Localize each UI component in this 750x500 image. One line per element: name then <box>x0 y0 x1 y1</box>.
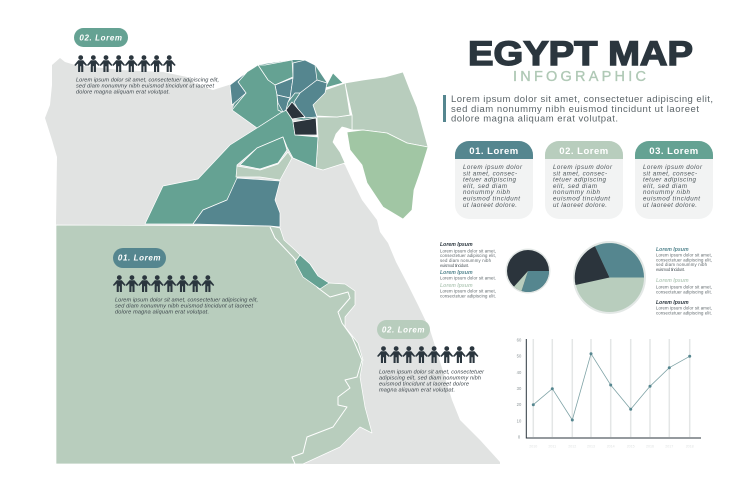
card 02 <box>545 141 623 219</box>
callout text: dolore magna aliquam erat volutpat. <box>76 90 170 96</box>
card 01 <box>455 141 533 219</box>
region: Dakahlia <box>288 60 317 102</box>
x axis labels: 2010 <box>529 444 537 448</box>
region: grey desert land <box>45 58 500 464</box>
left pie legend: Lorem Ipsum <box>440 283 473 289</box>
left pie legend: sed diam nonummy nibh <box>440 258 492 263</box>
people icons <box>74 55 176 72</box>
pill label <box>113 248 166 268</box>
card 01: Lorem ipsum dolor <box>463 164 523 171</box>
region: Beni Suef <box>236 152 292 180</box>
card 02: nonummy nibh <box>553 189 601 196</box>
card 01: tetuer adipiscing <box>463 177 517 184</box>
left pie legend: Lorem Ipsum <box>440 270 473 276</box>
y axis labels: 40 <box>517 370 522 375</box>
callout text: Lorem ipsum dolor sit amet, consectetuer <box>379 370 485 376</box>
intro paragraph: Lorem ipsum dolor sit amet, consectetuer adipiscing elit, <box>451 94 713 105</box>
x axis labels: 2016 <box>646 444 654 448</box>
intro paragraph <box>443 94 713 124</box>
region: Matruh and Giza <box>145 110 318 224</box>
pill label: 02. Lorem <box>382 326 425 334</box>
right pie legend: Lorem Ipsum <box>656 300 689 306</box>
right pie legend: Lorem Ipsum <box>656 247 689 253</box>
y axis labels: 50 <box>517 354 522 359</box>
region: north Sinai <box>345 72 428 147</box>
callout 02 upper <box>74 28 219 96</box>
callout text: magna aliquam erat volutpat. <box>379 388 455 394</box>
card 03: nonummy nibh <box>643 189 691 196</box>
left pie legend: consectetuer adipiscing elit, <box>440 253 496 258</box>
region: Beheira <box>232 65 282 128</box>
card 03: 03. Lorem <box>649 146 699 157</box>
region: Minya <box>193 178 280 227</box>
left pie legend <box>440 242 496 298</box>
y axis labels: 30 <box>517 386 522 391</box>
right pie legend: consectetuer adipiscing elit. <box>656 310 712 316</box>
people icons <box>113 275 214 292</box>
region: Sharqia <box>294 80 327 118</box>
subtitle: INFOGRAPHIC <box>513 69 646 85</box>
left pie legend: euismod tincidunt. <box>440 263 469 268</box>
callout 01 <box>113 248 258 316</box>
card 02: ut laoreet dolore. <box>553 202 607 209</box>
card 02: elit, sed diam <box>553 183 597 190</box>
y axis labels <box>517 338 522 440</box>
pill label: 01. Lorem <box>118 254 161 262</box>
right pie legend: Lorem Ipsum <box>656 278 689 284</box>
left pie legend: consectetuer adipiscing elit. <box>440 294 496 298</box>
map of Egypt <box>45 58 500 464</box>
region: Kafr el-Sheikh <box>258 60 293 85</box>
card 01: nonummy nibh <box>463 189 511 196</box>
intro paragraph: dolore magna aliquam erat volutpat. <box>451 114 618 124</box>
card 03: tetuer adipiscing <box>643 177 697 184</box>
right pie legend: consectetuer adipiscing elit. <box>656 290 712 294</box>
region: Ismailia <box>313 83 350 117</box>
callout text: sed diam nonummy nibh euismod tincidunt ut laoreet <box>76 84 214 90</box>
card 03: elit, sed diam <box>643 183 687 190</box>
callout text: sed diam nonummy nibh euismod tincidunt ut laoreet <box>115 304 253 310</box>
line chart <box>517 338 701 448</box>
large pie chart <box>573 241 646 314</box>
left pie legend: Lorem ipsum dolor sit amet, <box>440 248 496 254</box>
intro paragraph: sed diam nonummy nibh euismod tincidunt ut laoreet <box>451 104 699 115</box>
region: dark lower district <box>293 118 317 135</box>
card 03: euismod tincidunt <box>643 196 700 202</box>
right pie legend: Lorem ipsum dolor sit amet, <box>656 284 712 290</box>
right pie legend: consectetuer adipiscing elit, <box>656 258 712 262</box>
left pie legend: Lorem Ipsum <box>440 242 473 248</box>
x axis labels: 2014 <box>607 444 615 448</box>
card 03: ut laoreet dolore. <box>643 202 697 209</box>
x axis labels: 2013 <box>587 444 595 448</box>
y axis labels: 20 <box>517 402 522 407</box>
callout text: Lorem ipsum dolor sit amet, consectetuer adipiscing elit, <box>76 78 219 84</box>
card 01: sit amet, consec- <box>463 170 517 177</box>
river Nile line <box>270 227 362 464</box>
card 01: 01. Lorem <box>469 146 519 157</box>
right pie legend: sed diam nonummy nibh <box>656 262 708 267</box>
data line <box>533 354 690 420</box>
small pie chart <box>506 248 550 294</box>
left pie legend: Lorem ipsum dolor sit amet. <box>440 276 496 280</box>
card 03 <box>635 141 713 219</box>
x axis labels <box>529 444 694 448</box>
people icons <box>377 346 478 363</box>
left pie legend: Lorem ipsum dolor sit amet, <box>440 288 496 294</box>
region: southern western desert <box>56 225 372 464</box>
data points <box>532 352 691 422</box>
title: EGYPT MAP <box>468 35 693 73</box>
region: south Sinai <box>347 130 428 219</box>
region: Gharbia <box>275 78 293 98</box>
x axis labels: 2011 <box>548 444 556 448</box>
pill label: 02. Lorem <box>79 34 123 42</box>
card 02: Lorem ipsum dolor <box>553 164 613 171</box>
region: Monufia <box>277 95 290 112</box>
x axis labels: 2015 <box>627 444 635 448</box>
card 01: elit, sed diam <box>463 183 507 190</box>
card 02: tetuer adipiscing <box>553 177 607 184</box>
region: Suez <box>316 115 352 170</box>
y axis labels: 0 <box>518 434 521 440</box>
card 03: Lorem ipsum dolor <box>643 164 703 171</box>
pill label <box>74 28 128 47</box>
region: Qena strip <box>295 255 329 289</box>
right pie legend: euismod tincidunt. <box>656 267 685 272</box>
region: Port Said <box>325 73 343 88</box>
region: delta base fill <box>232 60 327 128</box>
x axis labels: 2012 <box>568 444 576 448</box>
callout 02 lower <box>377 320 485 394</box>
callout text: Lorem ipsum dolor sit amet, consectetuer adipiscing elit, <box>115 298 258 304</box>
callout text: adipiscing elit, sed diam nonummy nibh <box>379 376 481 382</box>
right pie legend <box>656 247 712 316</box>
region: Alexandria <box>230 72 247 105</box>
card 02: sit amet, consec- <box>553 170 607 177</box>
callout text: dolore magna aliquam erat volutpat. <box>115 310 209 316</box>
x axis labels: 2018 <box>686 444 694 448</box>
card 02: 02. Lorem <box>559 146 609 157</box>
y axis labels: 60 <box>517 338 522 342</box>
x axis labels: 2017 <box>665 444 673 448</box>
right pie legend: Lorem ipsum dolor sit amet, <box>656 306 712 310</box>
y axis labels: 10 <box>517 418 522 423</box>
card 01: ut laoreet dolore. <box>463 202 517 209</box>
right pie legend: Lorem ipsum dolor sit amet, <box>656 252 712 258</box>
card 01: euismod tincidunt <box>463 196 520 202</box>
card 02: euismod tincidunt <box>553 196 610 202</box>
callout text: euismod tincidunt ut laoreet dolore <box>379 382 469 388</box>
card 03: sit amet, consec- <box>643 170 697 177</box>
region: dark upper district <box>286 102 305 119</box>
region: Faiyum <box>240 137 287 169</box>
